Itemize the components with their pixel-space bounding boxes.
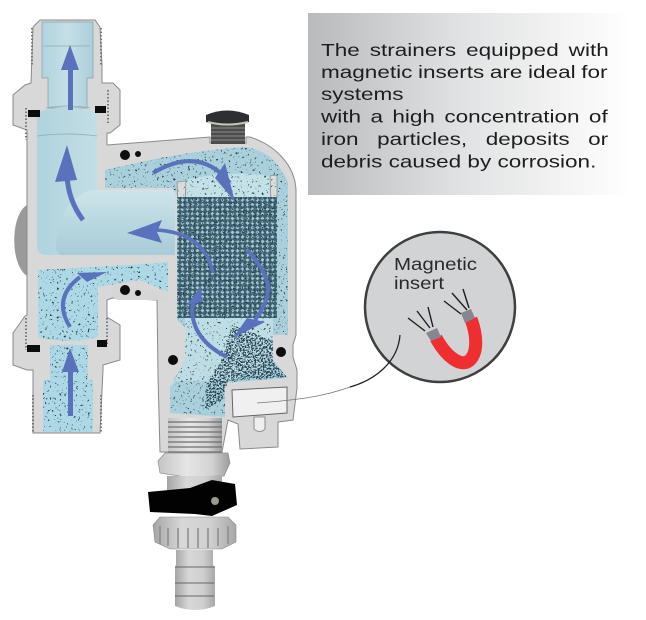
- T branch water: [56, 190, 175, 255]
- arrow: outlet up: [61, 45, 79, 110]
- threads: [26, 28, 108, 432]
- mesh filter: [177, 197, 277, 318]
- description text: systems: [321, 85, 404, 104]
- arrow: inlet curve: [63, 272, 107, 327]
- threaded neck: [168, 418, 222, 454]
- magnet holder: [232, 387, 287, 417]
- callout label: [394, 255, 478, 294]
- mesh dirt: [177, 197, 277, 318]
- hose barb: [175, 550, 215, 610]
- text panel: [308, 13, 640, 195]
- cap: [206, 110, 249, 124]
- leader line: [257, 335, 400, 403]
- description text: iron particles, deposits or: [321, 130, 608, 149]
- arrow: into branch: [127, 220, 213, 273]
- union ring: [153, 517, 236, 549]
- callout label: Magnetic: [394, 255, 478, 275]
- filter chamber water: [105, 147, 288, 417]
- description text: The strainers equipped with: [321, 41, 609, 60]
- callout label: insert: [394, 274, 445, 294]
- hex nut: [158, 453, 230, 477]
- strainer cutaway: [13, 20, 297, 610]
- valve body: [13, 20, 297, 452]
- arrow: right arc: [233, 250, 268, 338]
- lower seal plate: [112, 285, 168, 300]
- T pipe water: [37, 108, 175, 255]
- arrow: dome: [153, 161, 235, 202]
- lower chamber water: [38, 262, 168, 432]
- description text: debris caused by corrosion.: [321, 152, 596, 172]
- callout circle: [365, 232, 515, 382]
- debris inlet: [36, 262, 170, 434]
- description text: with a high concentration of: [320, 108, 608, 127]
- pale funnel below mesh: [172, 318, 273, 387]
- top pipe water: [42, 22, 93, 108]
- arrow: inlet up: [62, 348, 79, 416]
- upper pipe seam: [37, 46, 97, 136]
- inner wall gaskets: [177, 175, 277, 207]
- pale cylinder above mesh: [186, 174, 270, 198]
- description text: magnetic inserts are ideal for: [321, 63, 608, 82]
- arrow: left arc: [187, 286, 227, 357]
- ball valve handle: [148, 480, 237, 516]
- description text: [320, 41, 609, 172]
- debris upper and lower: [100, 145, 295, 420]
- holder tab: [254, 417, 265, 432]
- cap thread: [211, 123, 245, 144]
- black seals: [27, 106, 286, 365]
- rear dome: [14, 205, 27, 276]
- settled sludge: [205, 325, 286, 409]
- flow arrows: [55, 45, 268, 416]
- stem: [167, 476, 222, 496]
- arrow: pipe up: [55, 145, 83, 220]
- icon: horseshoe magnet: [408, 289, 476, 363]
